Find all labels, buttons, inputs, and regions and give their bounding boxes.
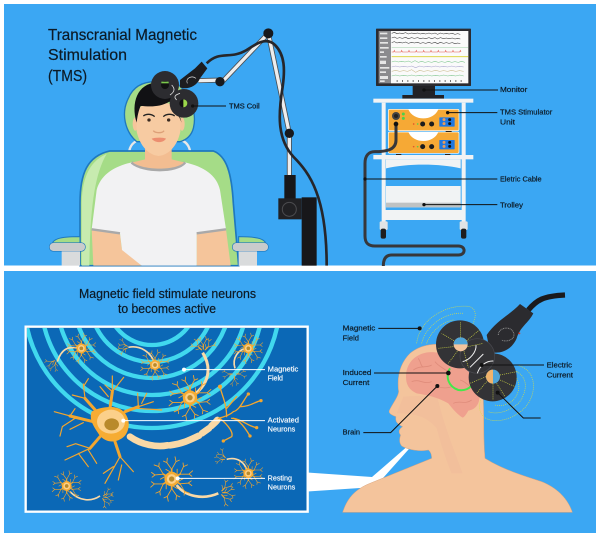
channel labels bbox=[380, 33, 389, 82]
resting neuron bottom left bbox=[51, 471, 115, 509]
head labels: Induced bbox=[343, 368, 371, 377]
neuron labels: Activated bbox=[268, 418, 299, 425]
arms bbox=[92, 229, 231, 266]
resting neuron bottom centre bbox=[148, 457, 235, 508]
trolley and stimulator units bbox=[363, 85, 553, 266]
cable socket bbox=[394, 122, 398, 126]
label: TMS coil: TMS Coil bbox=[229, 104, 260, 111]
head illustration bbox=[343, 295, 574, 512]
axon bbox=[130, 420, 217, 446]
head and shoulders bbox=[343, 344, 572, 512]
cable bbox=[207, 41, 327, 266]
head bbox=[133, 83, 185, 156]
small neuron top centre bbox=[116, 338, 171, 380]
heading: neurons bbox=[79, 287, 256, 316]
small neuron top left bbox=[44, 333, 97, 373]
throat bbox=[397, 395, 463, 473]
trolley frame bbox=[373, 99, 473, 223]
panel: neuron inset bbox=[24, 326, 309, 513]
unit feet bbox=[396, 131, 452, 155]
equipment labels: Unit bbox=[500, 117, 516, 126]
patient in chair bbox=[49, 82, 268, 266]
title bbox=[48, 27, 197, 85]
TMS stimulator unit top bbox=[388, 109, 459, 131]
chair armrests bbox=[49, 237, 268, 266]
trolley wheels bbox=[380, 221, 468, 239]
neuron labels: Resting bbox=[268, 475, 292, 482]
monitor stand bbox=[402, 86, 444, 99]
resting neuron bottom right bbox=[214, 447, 264, 489]
t-shirt bbox=[92, 162, 226, 266]
equipment labels: Trolley bbox=[500, 201, 523, 210]
heading: neurons: Magnetic field stimulate neurons bbox=[79, 287, 256, 301]
stand columns bbox=[278, 175, 317, 266]
neuron labels: Magnetic bbox=[268, 367, 299, 374]
dendrite branches bbox=[54, 376, 162, 483]
head labels bbox=[343, 323, 574, 436]
activated large neuron bbox=[54, 376, 263, 483]
title: Stimulation bbox=[48, 47, 127, 64]
neck bbox=[133, 143, 184, 169]
magnetic field arcs bbox=[27, 328, 280, 430]
neuron labels bbox=[268, 367, 299, 491]
white callout wedge bbox=[300, 431, 425, 492]
hair bbox=[135, 83, 182, 123]
head labels: Brain bbox=[343, 427, 360, 436]
title: Transcranial Magnetic bbox=[48, 27, 197, 44]
neuron labels: Neurons bbox=[268, 484, 296, 491]
head labels: Current bbox=[547, 370, 574, 379]
coils bbox=[436, 320, 517, 401]
coil openings bbox=[454, 337, 500, 384]
medium neuron bbox=[167, 336, 218, 420]
neuron labels: Field bbox=[268, 376, 283, 383]
dendrite trunks bbox=[70, 392, 138, 457]
EEG traces bbox=[392, 32, 468, 81]
head labels: Field bbox=[343, 333, 359, 342]
monitor bbox=[376, 29, 471, 99]
cable and handle bbox=[487, 295, 565, 353]
head labels: Magnetic bbox=[343, 323, 376, 332]
equipment labels: Monitor bbox=[500, 85, 528, 94]
coil handle bbox=[180, 62, 207, 88]
panel: neuron stimulation bbox=[4, 271, 596, 533]
stand arm bbox=[198, 33, 289, 175]
trolley drawer bbox=[386, 186, 461, 207]
brain bbox=[406, 352, 479, 418]
leader lines bbox=[363, 326, 544, 433]
axon terminal bbox=[218, 387, 261, 441]
chair back bbox=[80, 151, 239, 266]
small neuron top right bbox=[222, 333, 264, 386]
title: (TMS) bbox=[48, 68, 87, 85]
current arrows bbox=[463, 345, 493, 373]
equipment labels bbox=[500, 85, 553, 210]
neuron leader lines bbox=[121, 368, 265, 480]
TMS stimulator unit bottom bbox=[388, 132, 459, 153]
leader: TMS coil bbox=[191, 104, 226, 108]
electric cable bbox=[365, 124, 464, 266]
head labels: Electric bbox=[547, 360, 572, 369]
heading: neurons: to becomes active bbox=[118, 302, 216, 316]
neuron labels: Neurons bbox=[268, 427, 296, 434]
TMS coil bbox=[151, 71, 198, 118]
induced current bbox=[448, 368, 472, 390]
joint knobs bbox=[215, 28, 294, 138]
yellow field ticks bbox=[438, 322, 517, 400]
magnetic field lines bbox=[417, 306, 533, 421]
shirt trims bbox=[92, 162, 226, 233]
TMS stand arm and cable bbox=[151, 28, 327, 266]
equipment labels: TMS Stimulator bbox=[500, 108, 553, 117]
chair headrest bbox=[124, 82, 194, 151]
equipment labels: Eletric Cable bbox=[500, 175, 542, 184]
chair side highlight bbox=[82, 154, 107, 266]
panel: TMS setup bbox=[4, 4, 596, 266]
head labels: Current bbox=[343, 378, 370, 387]
soma bbox=[91, 407, 129, 441]
leader lines and dots bbox=[363, 88, 498, 206]
